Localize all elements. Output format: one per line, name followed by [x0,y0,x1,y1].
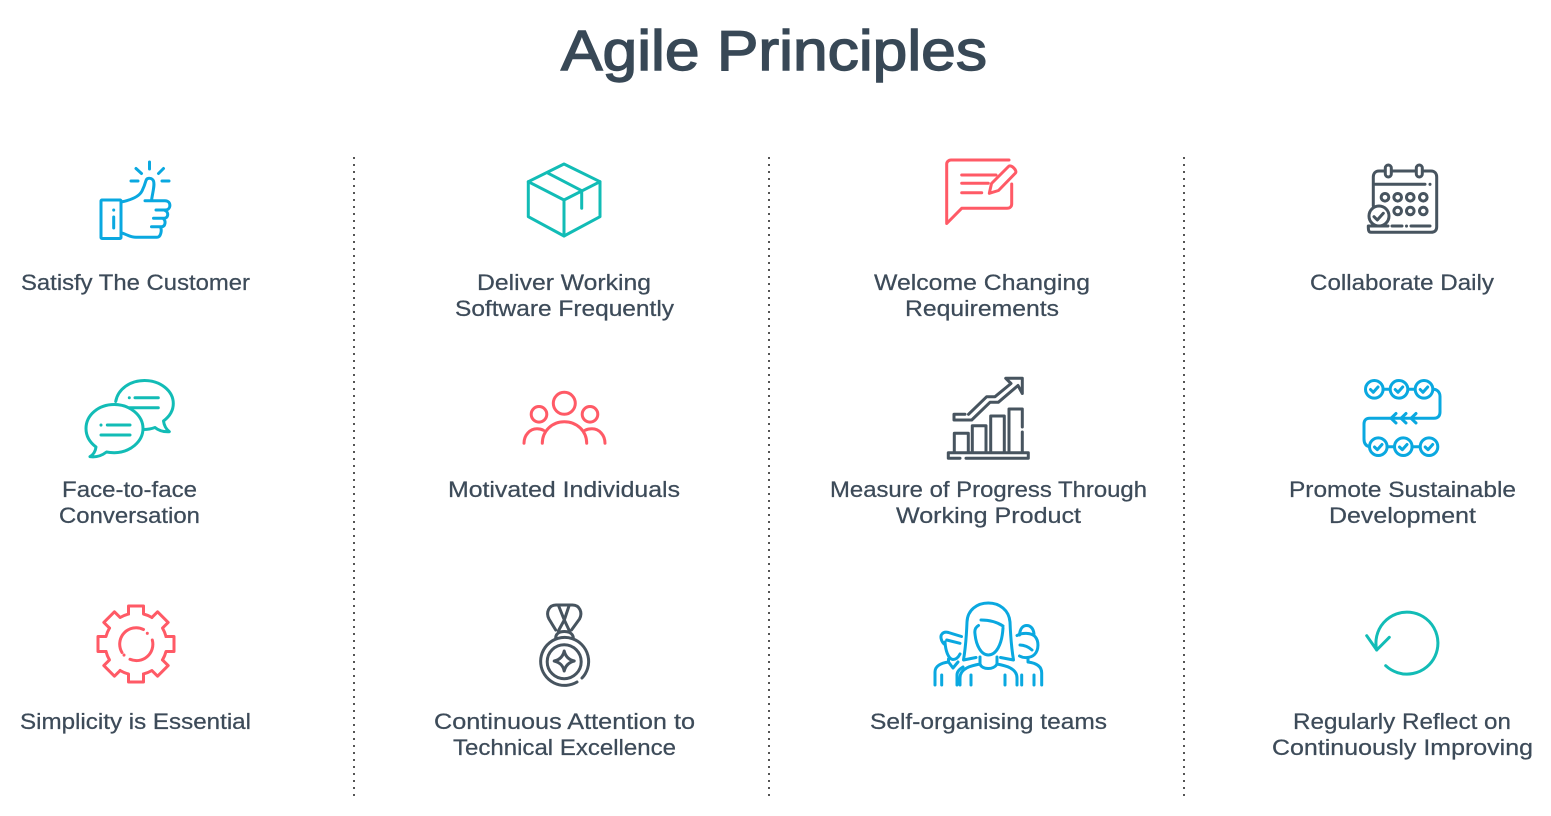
label: Satisfy The Customer [21,270,250,295]
icon: circular arrow [1367,612,1438,674]
principle: continuous attention to technical excellence [434,605,695,760]
principle: simplicity is essential [20,606,251,734]
icon: team of three people [935,603,1042,685]
label: Simplicity is Essential [20,709,251,734]
label: Face-to-face [62,477,197,502]
principle: motivated individuals [448,392,680,502]
label: Requirements [905,296,1059,321]
icon: process flow with checks [1364,380,1440,456]
principle: measure of progress [830,378,1147,528]
label: Measure of Progress Through [830,477,1147,502]
principle: satisfy the customer [21,162,250,295]
principle: self-organising teams [870,603,1107,734]
label: Development [1329,503,1476,528]
label: Regularly Reflect on [1293,709,1511,734]
label: Deliver Working [477,270,651,295]
icon: medal [541,605,589,685]
principle: deliver working software [455,164,674,321]
label: Self-organising teams [870,709,1107,734]
label [59,477,200,528]
title: Agile Principles [561,19,987,83]
label: Promote Sustainable [1289,477,1516,502]
label: Continuously Improving [1272,735,1533,760]
label: Conversation [59,503,200,528]
principle: promote sustainable development [1289,380,1516,528]
label: Technical Excellence [453,735,676,760]
label [830,477,1147,528]
label: Continuous Attention to [434,709,695,734]
principle: welcome changing requirements [874,160,1090,321]
icon: group of people [524,392,605,443]
label [434,709,695,760]
label: Motivated Individuals [448,477,680,502]
icon: box [528,164,600,236]
icon: calendar [1368,165,1437,232]
icon: gear [98,606,174,682]
icon: growth bar chart [948,378,1028,458]
label: Collaborate Daily [1310,270,1494,295]
label: Software Frequently [455,296,674,321]
principle: regularly reflect [1272,612,1533,760]
label [1289,477,1516,528]
icon: chat with pencil [947,160,1016,224]
label [455,270,674,321]
label [1272,709,1533,760]
principle: face-to-face conversation [59,380,200,528]
label [874,270,1090,321]
label: Welcome Changing [874,270,1090,295]
icon: speech bubbles [86,380,173,457]
icon: thumbs up [101,162,170,238]
principle: collaborate daily [1310,165,1494,295]
label: Working Product [896,503,1081,528]
